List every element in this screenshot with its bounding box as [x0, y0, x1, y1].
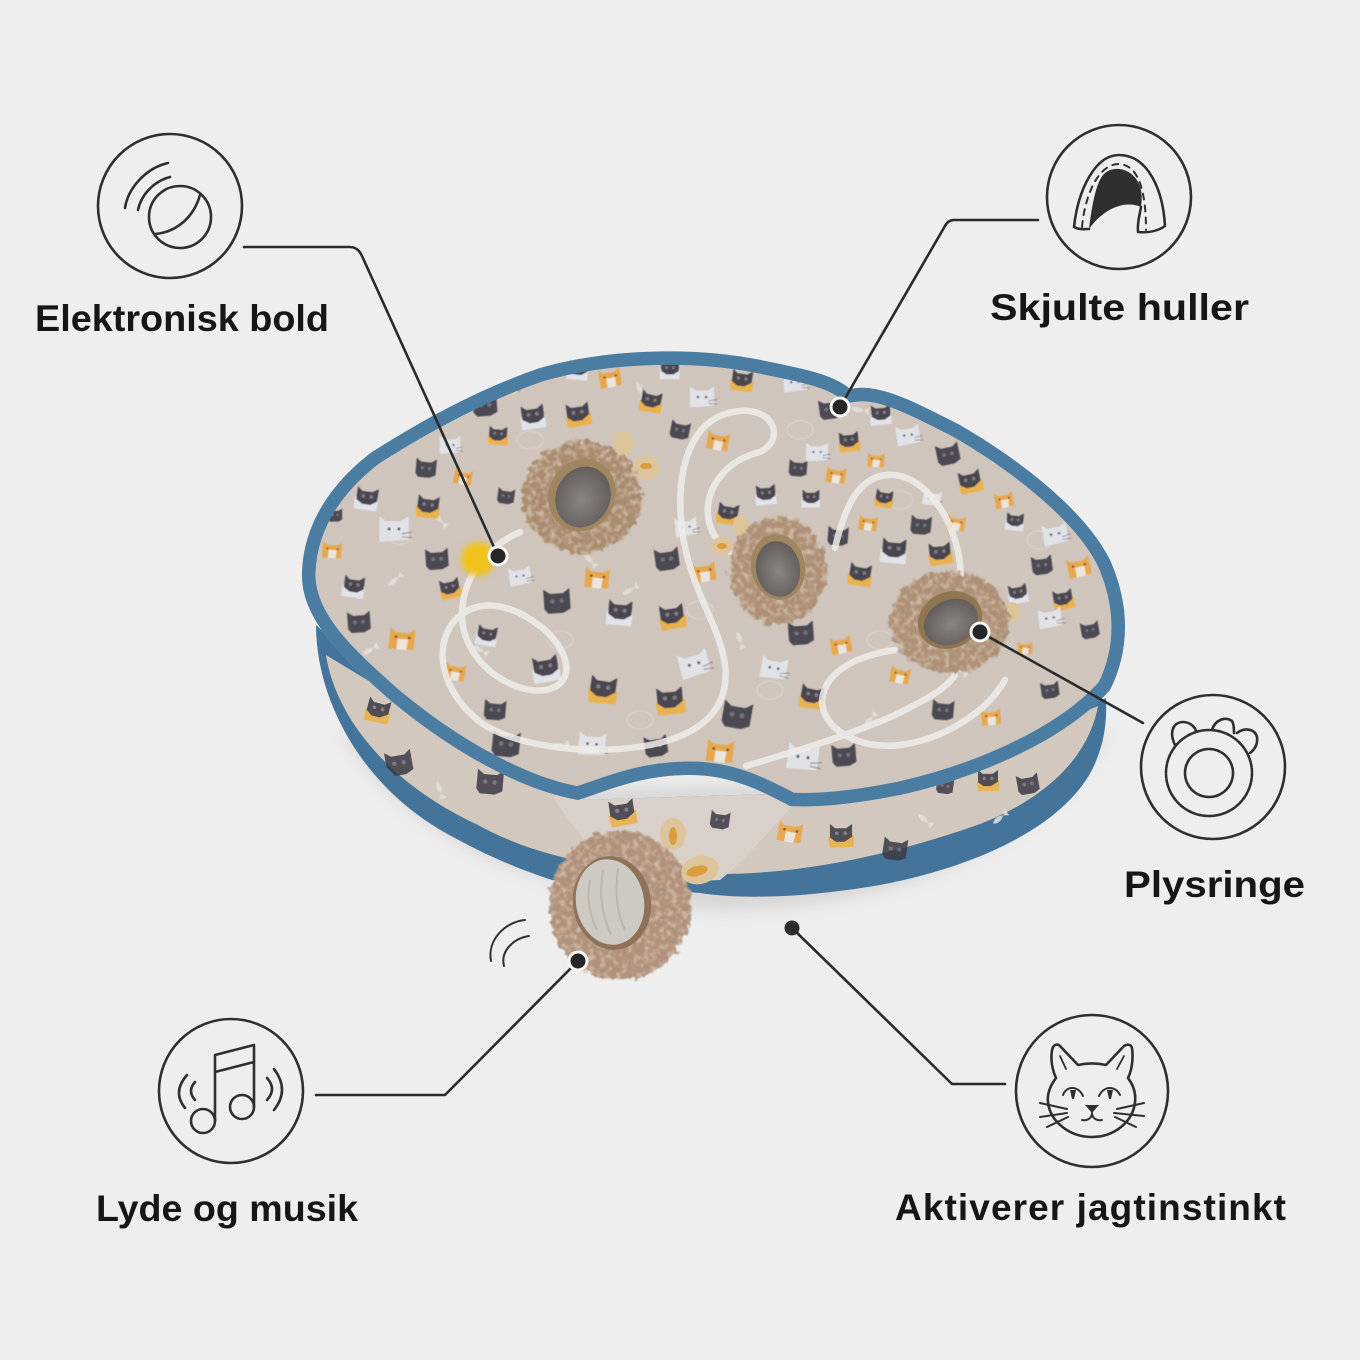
- label: Plysringe: Plysringe: [1124, 864, 1305, 905]
- soft shadow under the mat: [340, 730, 1110, 912]
- callout: Lyde og musik: [96, 952, 587, 1229]
- mat side wall with translucent cat fabric: [326, 655, 1098, 885]
- product: electronic cat play mat: [302, 351, 1125, 980]
- icon: ball with motion arcs: [98, 134, 242, 278]
- callout: Plysringe: [971, 623, 1305, 905]
- side wall cat prints: [362, 696, 1040, 862]
- label: Elektronisk bold: Elektronisk bold: [35, 298, 329, 339]
- plush ring 1: [522, 430, 660, 553]
- icon: music note with sound waves: [159, 1019, 303, 1163]
- plush ring 2: [711, 515, 827, 624]
- vibration marks next to the ball: [490, 920, 529, 966]
- callout dot: ball: [489, 547, 507, 565]
- front plush ring with electronic ball: [549, 818, 722, 980]
- callout: Aktiverer jagtinstinkt: [784, 920, 1286, 1228]
- label: Aktiverer jagtinstinkt: Aktiverer jagtinstinkt: [895, 1187, 1286, 1228]
- leader line: hole: [840, 220, 1038, 407]
- callout dot: hole: [831, 398, 849, 416]
- blue binding around the top surface: [302, 351, 1125, 806]
- mat top surface: [302, 351, 1125, 806]
- callout dot: hunting instinct: [784, 920, 800, 936]
- leader line: ball: [244, 247, 498, 556]
- electronic ball: [569, 854, 651, 950]
- side wall fabric: [326, 655, 1098, 874]
- callout dot: plush ring: [971, 623, 989, 641]
- icon: plush ring with ears: [1141, 695, 1285, 839]
- icon: hidden tunnel hole: [1047, 125, 1191, 269]
- leader line: sound: [316, 961, 578, 1095]
- yellow pompom ball: [461, 542, 495, 576]
- leader line: hunting instinct: [792, 928, 1005, 1084]
- leader line: plush ring: [980, 632, 1143, 723]
- callout: Elektronisk bold: [35, 134, 507, 565]
- label: Skjulte huller: Skjulte huller: [990, 287, 1249, 328]
- callout: Skjulte huller: [831, 125, 1249, 416]
- mat base: blue lower rim: [316, 625, 1106, 897]
- white winding track: [443, 411, 1005, 766]
- icon: cat face: [1016, 1015, 1168, 1167]
- label: Lyde og musik: Lyde og musik: [96, 1188, 358, 1229]
- top surface printed cats: [322, 359, 1100, 773]
- callout dot: sound: [569, 952, 587, 970]
- plush ring 3: [890, 571, 1020, 673]
- tunnel opening: [551, 794, 791, 882]
